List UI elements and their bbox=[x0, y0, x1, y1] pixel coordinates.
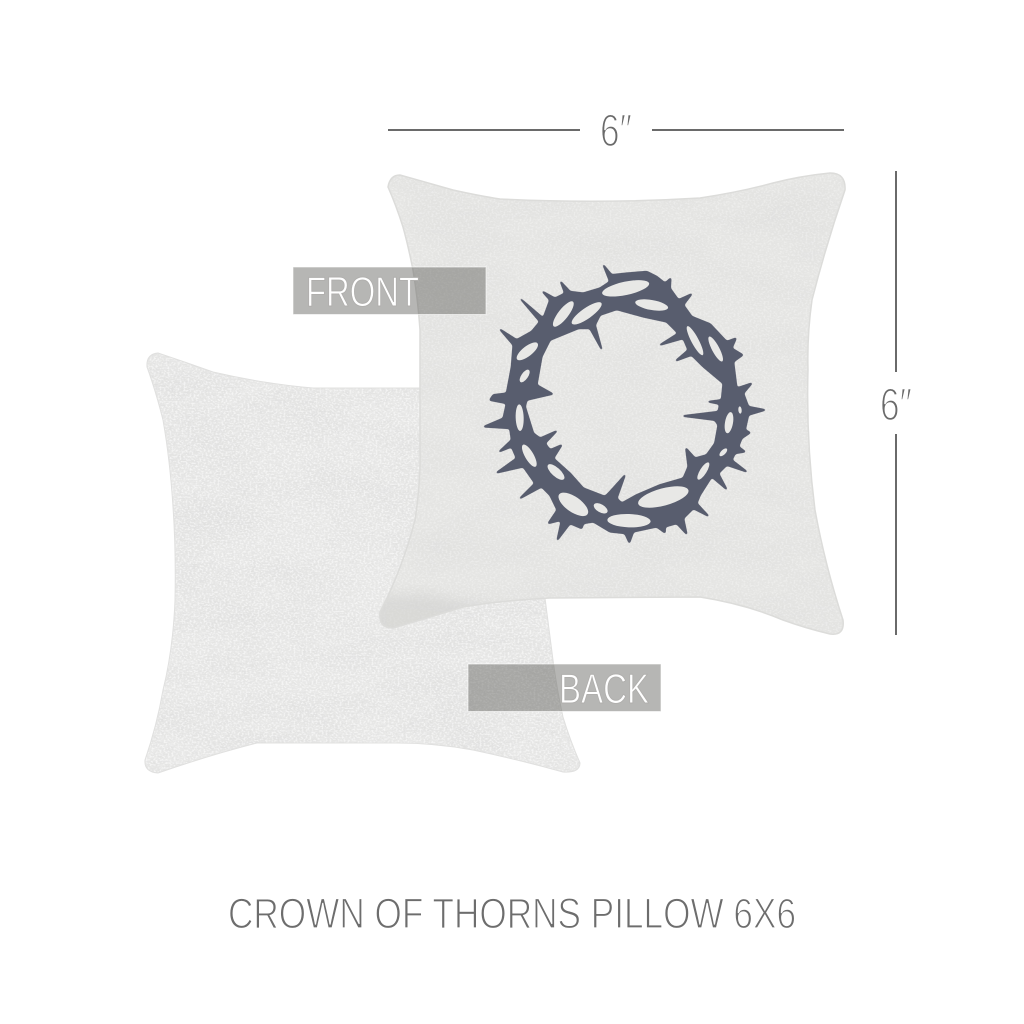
width dimension: 6 inches: 6″ bbox=[600, 105, 632, 156]
back pillow bbox=[140, 345, 590, 780]
front pillow bbox=[372, 170, 850, 650]
label: FRONT: FRONT bbox=[306, 268, 419, 315]
crown openings bbox=[514, 277, 742, 528]
icon: crown of thorns embroidery bbox=[484, 265, 765, 543]
height dimension: 6 inches: 6″ bbox=[880, 379, 912, 430]
label: BACK: BACK bbox=[559, 665, 649, 712]
title: CROWN OF THORNS PILLOW 6X6 bbox=[228, 890, 796, 938]
label: BACK bbox=[468, 664, 661, 712]
